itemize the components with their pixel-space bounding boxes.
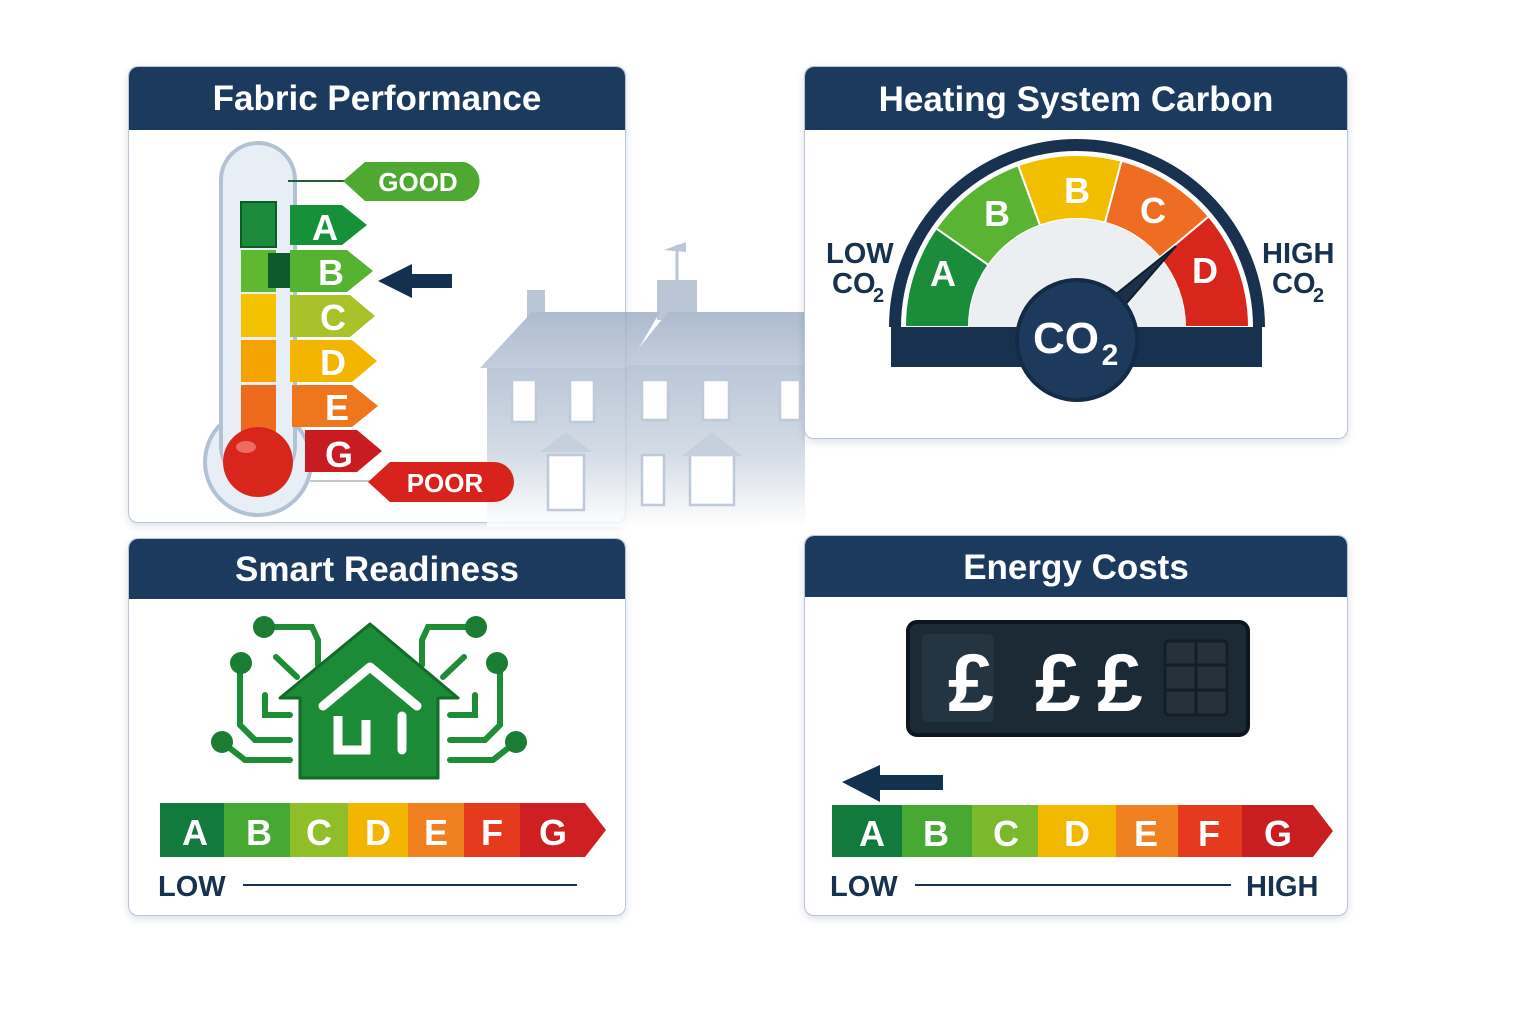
display: £££ meter: £ [1035,638,1081,729]
rating bar A-G: G [539,812,567,853]
label: POOR [310,462,514,502]
gauge: 2 [1102,339,1118,372]
label: LOW CO2: CO [832,268,876,300]
rating bar A-G: E [424,812,448,853]
heading: Energy Costs [805,536,1347,597]
gauge: B [1064,170,1090,211]
panel: smart readiness [128,538,626,916]
gauge: B [984,193,1010,234]
rating bar A-G: D [1064,813,1090,854]
rating arrows A-G: B [318,252,344,293]
gauge: C [1140,190,1166,231]
rating bar A-G: E [1134,813,1158,854]
heading: Fabric Performance: Fabric Performance [213,79,541,118]
rating bar A-G: A [182,812,208,853]
rating arrows A-G: D [320,342,346,383]
label: HIGH CO2: 2 [1313,285,1324,307]
display: £££ meter [908,622,1248,735]
label: LOW CO2: 2 [873,285,884,307]
label: POOR: POOR [407,468,484,498]
gauge: D [1192,250,1218,291]
panel: heating system carbon [804,66,1348,439]
heading: Heating System Carbon [805,67,1347,130]
rating bar A-G: D [365,812,391,853]
rating arrows A-G: A [312,207,338,248]
scale LOW-HIGH: HIGH [1246,871,1318,903]
gauge: A [930,253,956,294]
rating bar A-G [160,803,606,857]
rating bar A-G: A [859,813,885,854]
panel: energy costs [804,535,1348,916]
heading: Heating System Carbon: Heating System Carbon [879,80,1273,119]
arrow: pointer at B [378,264,452,298]
gauge: CO [1033,314,1099,363]
label: HIGH CO2 [1262,238,1334,307]
rating bar A-G: B [246,812,272,853]
label: GOOD [288,162,480,201]
rating bar A-G: G [1264,813,1292,854]
scale LOW-HIGH: LOW [830,871,898,903]
display: £££ meter: £ [948,638,994,729]
scale LOW-HIGH [830,871,1318,903]
rating bar A-G: C [306,812,332,853]
icon: thermometer [205,143,311,515]
icon: smart house [211,616,527,778]
heading: Energy Costs: Energy Costs [963,548,1189,587]
rating bar A-G: F [1198,813,1220,854]
heading: Smart Readiness: Smart Readiness [235,550,519,589]
label: GOOD: GOOD [378,167,458,197]
heading: Fabric Performance [129,67,625,130]
rating arrows A-G [290,205,382,475]
rating bar A-G: C [993,813,1019,854]
label: HIGH CO2: HIGH [1262,238,1334,270]
rating bar A-G: F [481,812,503,853]
label: HIGH CO2: CO [1272,268,1316,300]
rating arrows A-G: G [325,434,353,475]
rating arrows A-G: E [325,387,349,428]
rating bar A-G [832,805,1333,857]
label: LOW CO2 [826,238,894,307]
scale LOW: LOW [158,871,226,903]
arrow: pointing left [842,765,943,802]
label: LOW CO2: LOW [826,238,894,270]
display: £££ meter: £ [1097,638,1143,729]
rating arrows A-G: C [320,297,346,338]
panel: fabric performance [128,66,626,523]
heading: Smart Readiness [129,539,625,599]
rating bar A-G: B [923,813,949,854]
